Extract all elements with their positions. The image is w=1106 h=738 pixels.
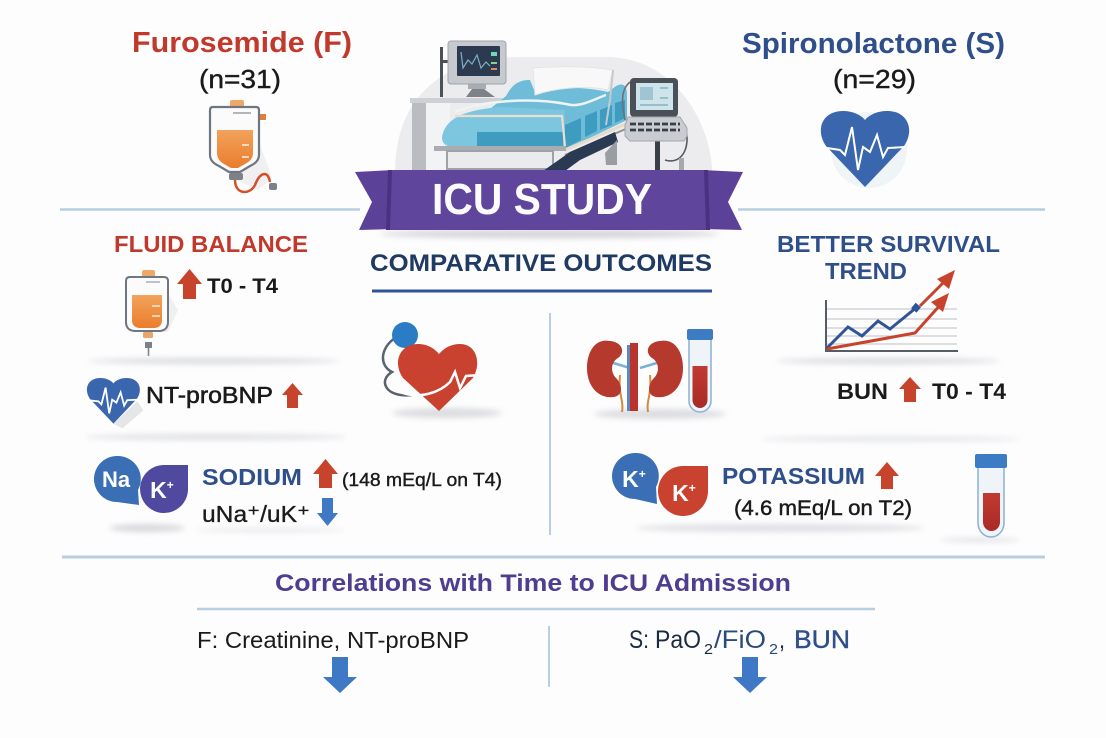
- heading: Spironolactone group: [742, 28, 1005, 94]
- text: spironolactone correlations: ,: [779, 626, 785, 654]
- icon: Na and K bubbles: [94, 456, 188, 532]
- text: spironolactone correlations: 2: [704, 641, 713, 658]
- icon: potassium bubbles: +: [689, 481, 696, 495]
- text: BUN time range: T0 - T4: [932, 379, 1007, 404]
- icon: potassium bubbles: +: [639, 467, 646, 481]
- icon: Na and K bubbles: K: [150, 477, 167, 503]
- arrow: furosemide correlation down: [323, 657, 357, 693]
- text: spironolactone correlations: BUN: [794, 626, 850, 654]
- text: NT-proBNP: NT-proBNP: [146, 382, 273, 408]
- heading: Furosemide group: Furosemide (F): [132, 27, 352, 59]
- heading: Furosemide group: (n=31): [199, 64, 281, 94]
- text: potassium value: (4.6 mEq/L on T2): [734, 497, 912, 520]
- panel: furosemide outcomes: [85, 231, 502, 532]
- arrow: NT-proBNP up: [282, 383, 303, 408]
- heading: Correlations with Time to ICU Admission: Correlations with Time to ICU Admission: [275, 570, 791, 597]
- heading: Better Survival Trend: BETTER SURVIVAL: [777, 231, 1000, 257]
- arrow: potassium up: [875, 462, 899, 489]
- text: spironolactone correlations: 2: [769, 641, 778, 658]
- heading: Furosemide group: [132, 27, 352, 94]
- text: Sodium: SODIUM: [202, 464, 302, 490]
- text: spironolactone correlations: PaO: [655, 626, 701, 654]
- icon: Na and K bubbles: Na: [102, 467, 131, 492]
- heading: Comparative Outcomes: COMPARATIVE OUTCOMES: [370, 250, 712, 277]
- text: furosemide correlations: F: Creatinine, NT-proBNP: [197, 627, 469, 653]
- icon: small IV bag: [126, 270, 178, 356]
- icon: small blue heart: [87, 378, 143, 428]
- icon: potassium bubbles: K: [672, 480, 689, 506]
- heading: Comparative Outcomes: [370, 250, 712, 292]
- icon: heart with stethoscope: [383, 322, 502, 418]
- text: spironolactone correlations: /FiO: [714, 626, 766, 654]
- text: urinary sodium potassium ratio: uNa⁺/uK⁺: [202, 501, 310, 527]
- text: spironolactone correlations: [629, 626, 850, 658]
- icon: blood tube: [940, 454, 1020, 542]
- text: Potassium: POTASSIUM: [722, 463, 865, 489]
- heading: Spironolactone group: Spironolactone (S): [742, 28, 1005, 60]
- icon: potassium bubbles: [612, 453, 708, 516]
- arrow: spironolactone correlation down: [733, 657, 767, 693]
- heading: Spironolactone group: (n=29): [833, 64, 916, 94]
- heading: Better Survival Trend: TREND: [825, 258, 907, 284]
- heading: Better Survival Trend: [777, 231, 1000, 284]
- icon: blue heart with ECG line: [821, 111, 909, 188]
- arrow: BUN up: [899, 377, 921, 402]
- icon: kidneys and blood tube: [587, 329, 726, 419]
- icon: Na and K bubbles: +: [167, 478, 174, 492]
- banner: ICU STUDY ribbon: [355, 170, 743, 238]
- panel: spironolactone outcomes: [612, 231, 1020, 542]
- arrow: sodium up: [313, 459, 338, 488]
- heading: Fluid Balance: FLUID BALANCE: [114, 231, 308, 257]
- icon: IV bag with orange fluid: [210, 100, 277, 192]
- arrow: fluid balance up: [177, 269, 202, 299]
- banner: ICU STUDY ribbon: ICU STUDY: [432, 175, 652, 224]
- text: T0 - T4: T0 - T4: [207, 275, 278, 298]
- icon: potassium bubbles: K: [622, 466, 639, 492]
- arrow: ratio down: [317, 498, 338, 526]
- text: spironolactone correlations: S:: [629, 626, 649, 654]
- chart: survival trend lines: [826, 270, 958, 351]
- text: BUN: BUN: [837, 379, 888, 404]
- illustration: ICU bed and monitors: [395, 41, 712, 172]
- text: sodium value: (148 mEq/L on T4): [342, 470, 502, 490]
